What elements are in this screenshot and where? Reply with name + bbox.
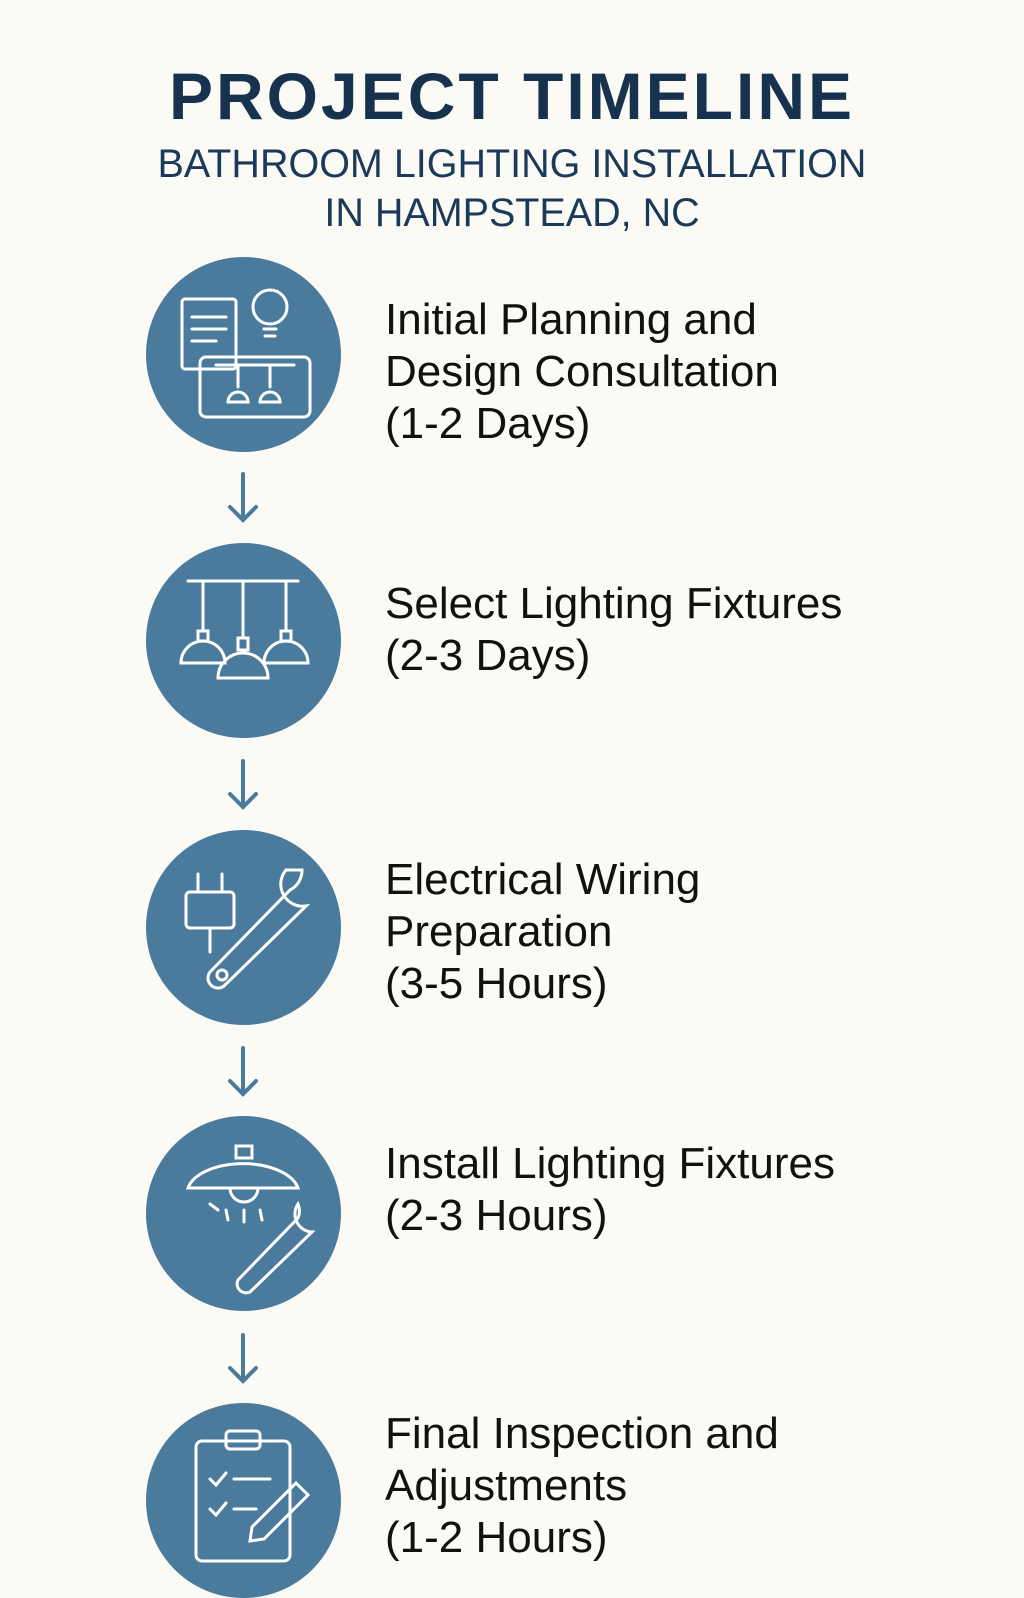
subtitle: BATHROOM LIGHTING INSTALLATION (158, 142, 866, 186)
step 3 text: Electrical Wiring (385, 855, 700, 904)
subtitle (158, 142, 866, 235)
step 5 text: (1-2 Hours) (385, 1513, 608, 1562)
icon: inspection (146, 1403, 341, 1598)
step 5 text (385, 1409, 779, 1562)
step 2 text: (2-3 Days) (385, 631, 590, 680)
step 2 text (385, 579, 842, 680)
arrow 3 (228, 1046, 258, 1097)
step 1 text: (1-2 Days) (385, 399, 590, 448)
step 3 text (385, 855, 700, 1008)
step 3 text: (3-5 Hours) (385, 959, 608, 1008)
icon: install (146, 1116, 341, 1311)
arrow 1 (228, 472, 258, 523)
step 4 text (385, 1139, 835, 1240)
icon: wiring (146, 830, 341, 1025)
step 4 text: (2-3 Hours) (385, 1191, 608, 1240)
step 5 text: Adjustments (385, 1461, 627, 1510)
step 2 text: Select Lighting Fixtures (385, 579, 842, 628)
step 1 text: Design Consultation (385, 347, 779, 396)
arrow 2 (228, 759, 258, 810)
icon: fixtures (146, 543, 341, 738)
step 5 text: Final Inspection and (385, 1409, 779, 1458)
icon: planning (146, 257, 341, 452)
step 4 text: Install Lighting Fixtures (385, 1139, 835, 1188)
arrow 4 (228, 1333, 258, 1384)
title: PROJECT TIMELINE (169, 59, 855, 133)
subtitle: IN HAMPSTEAD, NC (324, 191, 700, 235)
step 1 text (385, 295, 779, 448)
step 1 text: Initial Planning and (385, 295, 757, 344)
step 3 text: Preparation (385, 907, 612, 956)
